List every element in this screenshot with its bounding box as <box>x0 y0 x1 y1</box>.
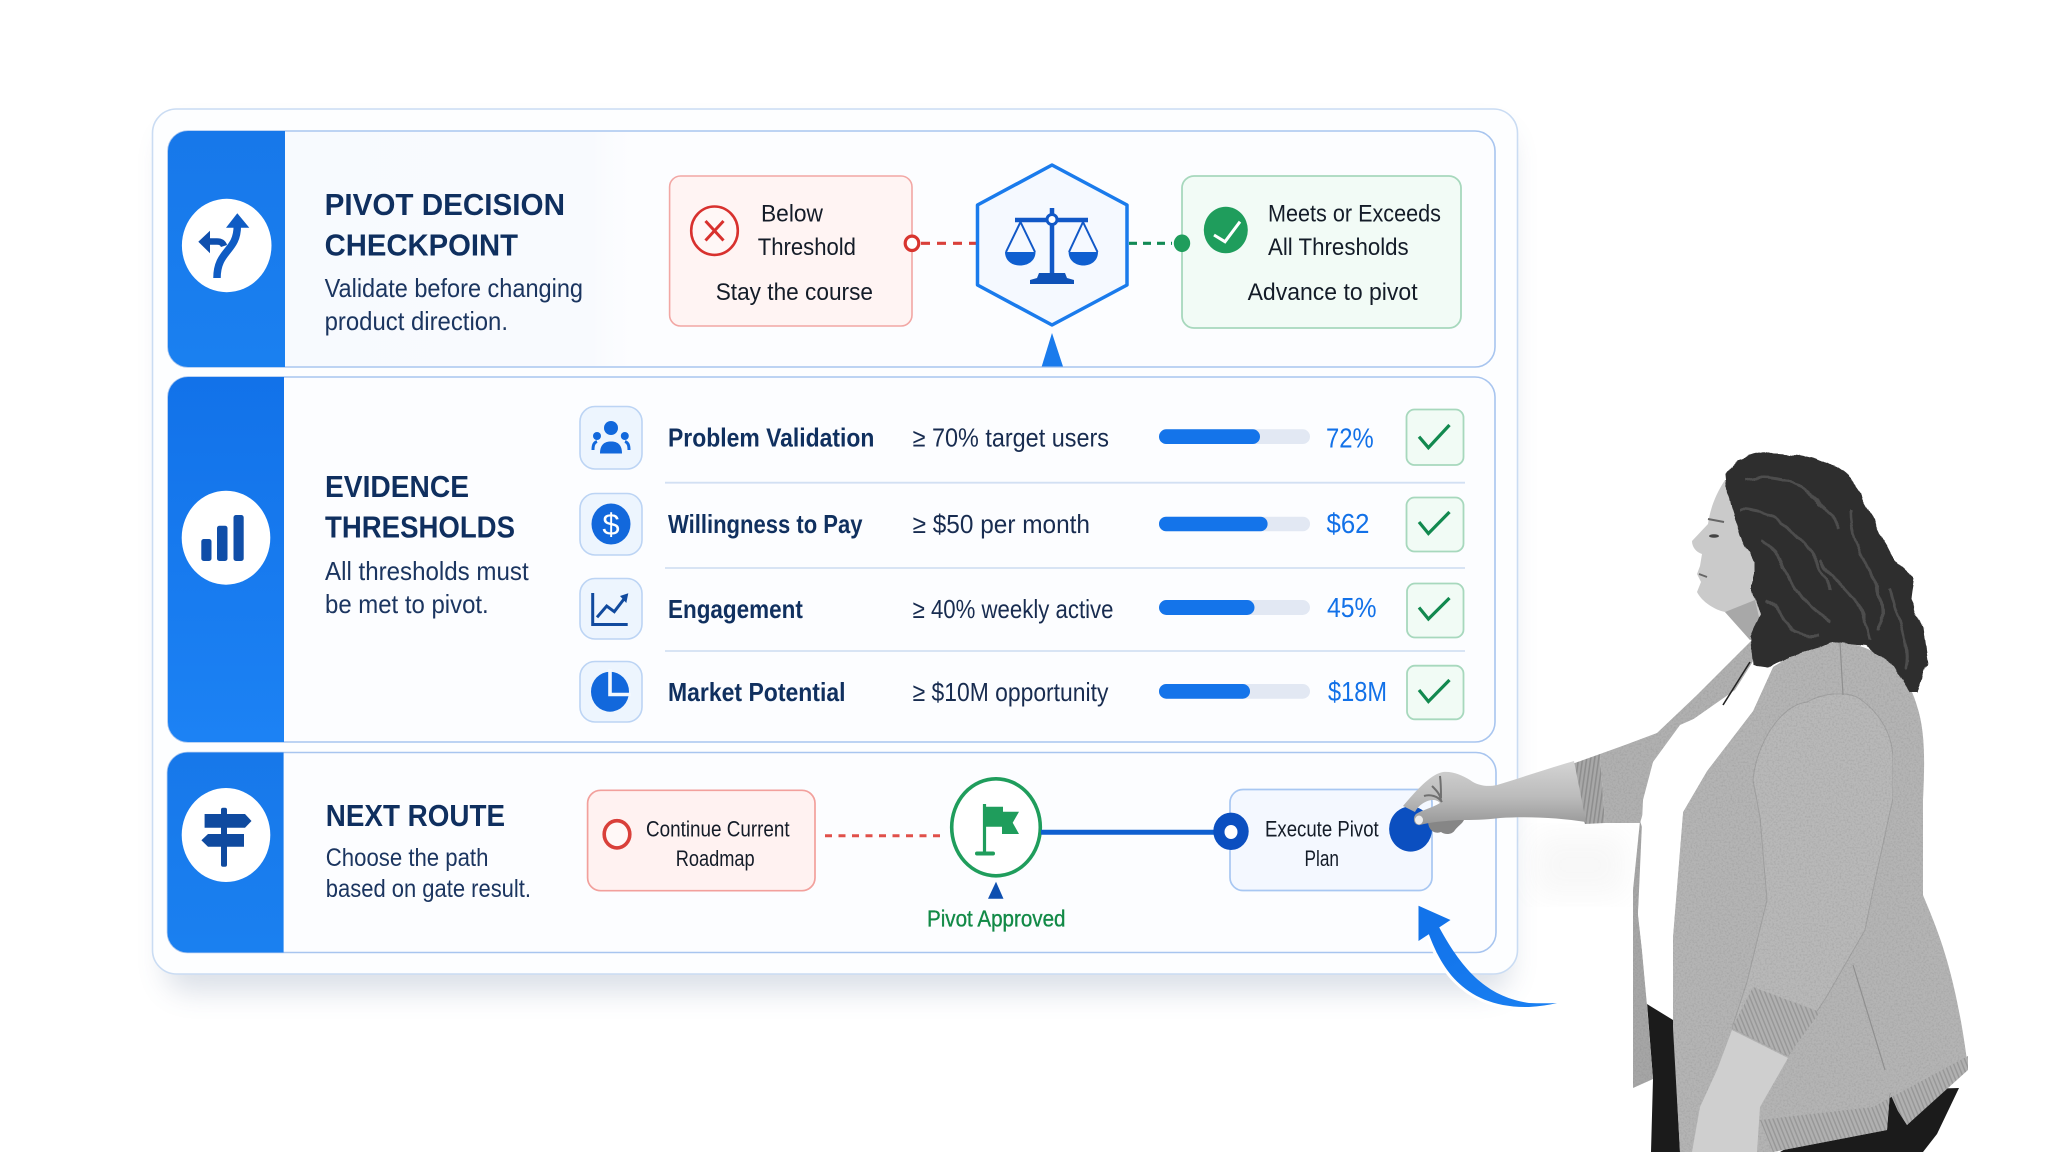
box: continue current roadmap: Continue Current <box>646 817 790 842</box>
text: validate before changing: Validate before changing <box>325 273 583 303</box>
connector: red dashed <box>825 834 942 837</box>
hair <box>1725 453 1928 692</box>
white shirt <box>1638 667 1773 1020</box>
far arm sleeve and collar <box>1600 640 1760 1088</box>
person: presenter in cardigan <box>1403 453 1968 1152</box>
near sleeve <box>1732 694 1893 1056</box>
box: execute pivot plan: Plan <box>1304 846 1339 871</box>
bar: $62 <box>1159 517 1310 531</box>
near cuff <box>1732 987 1820 1056</box>
icon: pie chart <box>580 662 642 722</box>
icon: dollar: $ <box>602 507 620 542</box>
text: choose the path <box>326 844 531 903</box>
box: meets or exceeds: Meets or Exceeds <box>1268 201 1441 228</box>
text: choose the path: based on gate result. <box>326 875 531 903</box>
arrow: up triangle <box>1042 333 1063 366</box>
marker: blue disc <box>1389 806 1432 852</box>
icon: green check <box>1204 207 1248 253</box>
trousers <box>1647 1003 1959 1152</box>
box: below threshold <box>670 176 912 326</box>
icon: users <box>580 406 642 469</box>
icon: red x <box>691 206 738 255</box>
connector: blue line <box>1041 830 1216 835</box>
panel: evidence thresholds <box>168 377 1495 742</box>
shadow under arm <box>1535 835 1625 895</box>
box: below threshold: Stay the course <box>716 279 873 306</box>
panel: pivot decision checkpoint <box>168 131 1495 367</box>
check box <box>1406 410 1464 465</box>
text: all thresholds must be met: be met to pivot. <box>325 589 489 619</box>
row: market potential <box>580 662 1464 722</box>
text: validate before changing <box>325 273 583 336</box>
marker: blue ring <box>1213 813 1249 850</box>
bar: 45% <box>1159 600 1310 615</box>
icon: diverging route arrows <box>182 199 272 292</box>
box: continue current roadmap <box>588 790 815 891</box>
icon: line chart <box>580 578 642 639</box>
text: all thresholds must be met: All thresholds must <box>325 556 529 586</box>
far cuff <box>1572 754 1605 824</box>
row: willingness to pay: Willingness to Pay <box>668 509 863 539</box>
box: meets or exceeds: Advance to pivot <box>1248 279 1418 306</box>
row: engagement <box>580 578 1464 639</box>
icon: hexagon scales <box>978 165 1127 325</box>
arm and back of hand <box>1403 761 1586 825</box>
heading: pivot decision checkpoint: PIVOT DECISION <box>325 187 565 222</box>
row: problem validation: ≥ 70% target users <box>913 423 1109 453</box>
outer card <box>152 109 1518 974</box>
seam lines <box>1840 642 1885 1070</box>
arrow: curved blue <box>1418 906 1557 1009</box>
box: execute pivot plan: Execute Pivot <box>1265 817 1379 842</box>
row: market potential: ≥ $10M opportunity <box>913 677 1108 707</box>
near forearm <box>1692 1030 1788 1152</box>
pointing arm and hand <box>1403 761 1586 834</box>
text: choose the path: Choose the path <box>326 844 488 872</box>
heading: pivot decision checkpoint: CHECKPOINT <box>325 228 518 263</box>
heading: next route: NEXT ROUTE <box>326 798 505 833</box>
icon: red ring <box>604 821 630 848</box>
row: willingness to pay <box>580 494 1464 555</box>
box: meets or exceeds <box>1182 176 1461 328</box>
check box <box>1407 666 1464 719</box>
row: market potential: $18M <box>1328 676 1387 707</box>
heading: evidence thresholds: EVIDENCE <box>325 469 469 504</box>
check box <box>1407 584 1464 638</box>
icon: dollar <box>580 494 642 555</box>
row: engagement: ≥ 40% weekly active <box>913 594 1114 624</box>
box: below threshold: Threshold <box>758 234 856 261</box>
icon: bar chart <box>182 491 270 585</box>
bar: 72% <box>1159 429 1310 444</box>
bar: $18M <box>1159 684 1310 699</box>
necklace <box>1723 662 1750 705</box>
row: problem validation: 72% <box>1326 422 1374 453</box>
row: engagement: Engagement <box>668 594 803 624</box>
connector: green dashed <box>1129 234 1190 252</box>
lower fingers <box>1428 816 1464 834</box>
text: all thresholds must be met <box>325 556 529 619</box>
row: willingness to pay: $62 <box>1326 508 1370 539</box>
face and neck <box>1692 480 1775 640</box>
row: engagement: 45% <box>1327 592 1377 623</box>
hem rib <box>1760 1056 1968 1152</box>
box: meets or exceeds: All Thresholds <box>1268 234 1409 261</box>
box: execute pivot plan <box>1213 790 1432 890</box>
box: below threshold: Below <box>761 201 824 228</box>
icon: signpost <box>182 788 270 882</box>
thumb nail <box>1415 816 1423 824</box>
row: problem validation <box>580 406 1464 469</box>
heading: evidence thresholds: THRESHOLDS <box>325 510 515 545</box>
row: problem validation: Problem Validation <box>668 423 874 453</box>
torso cardigan <box>1673 642 1968 1152</box>
card shadow <box>165 130 1510 992</box>
check box <box>1406 498 1464 552</box>
marker: blue triangle <box>988 882 1004 899</box>
row: willingness to pay: ≥ $50 per month <box>913 509 1090 539</box>
panel: next route <box>168 752 1496 952</box>
connector: red dashed <box>905 236 977 250</box>
label: pivot approved: Pivot Approved <box>927 906 1066 932</box>
box: continue current roadmap: Roadmap <box>676 846 755 871</box>
text: validate before changing: product direction. <box>325 306 508 336</box>
heading: pivot decision checkpoint <box>325 187 565 263</box>
finger shadows <box>1424 776 1442 802</box>
heading: evidence thresholds <box>325 469 515 545</box>
row: market potential: Market Potential <box>668 677 846 707</box>
icon: green flag <box>952 779 1040 876</box>
